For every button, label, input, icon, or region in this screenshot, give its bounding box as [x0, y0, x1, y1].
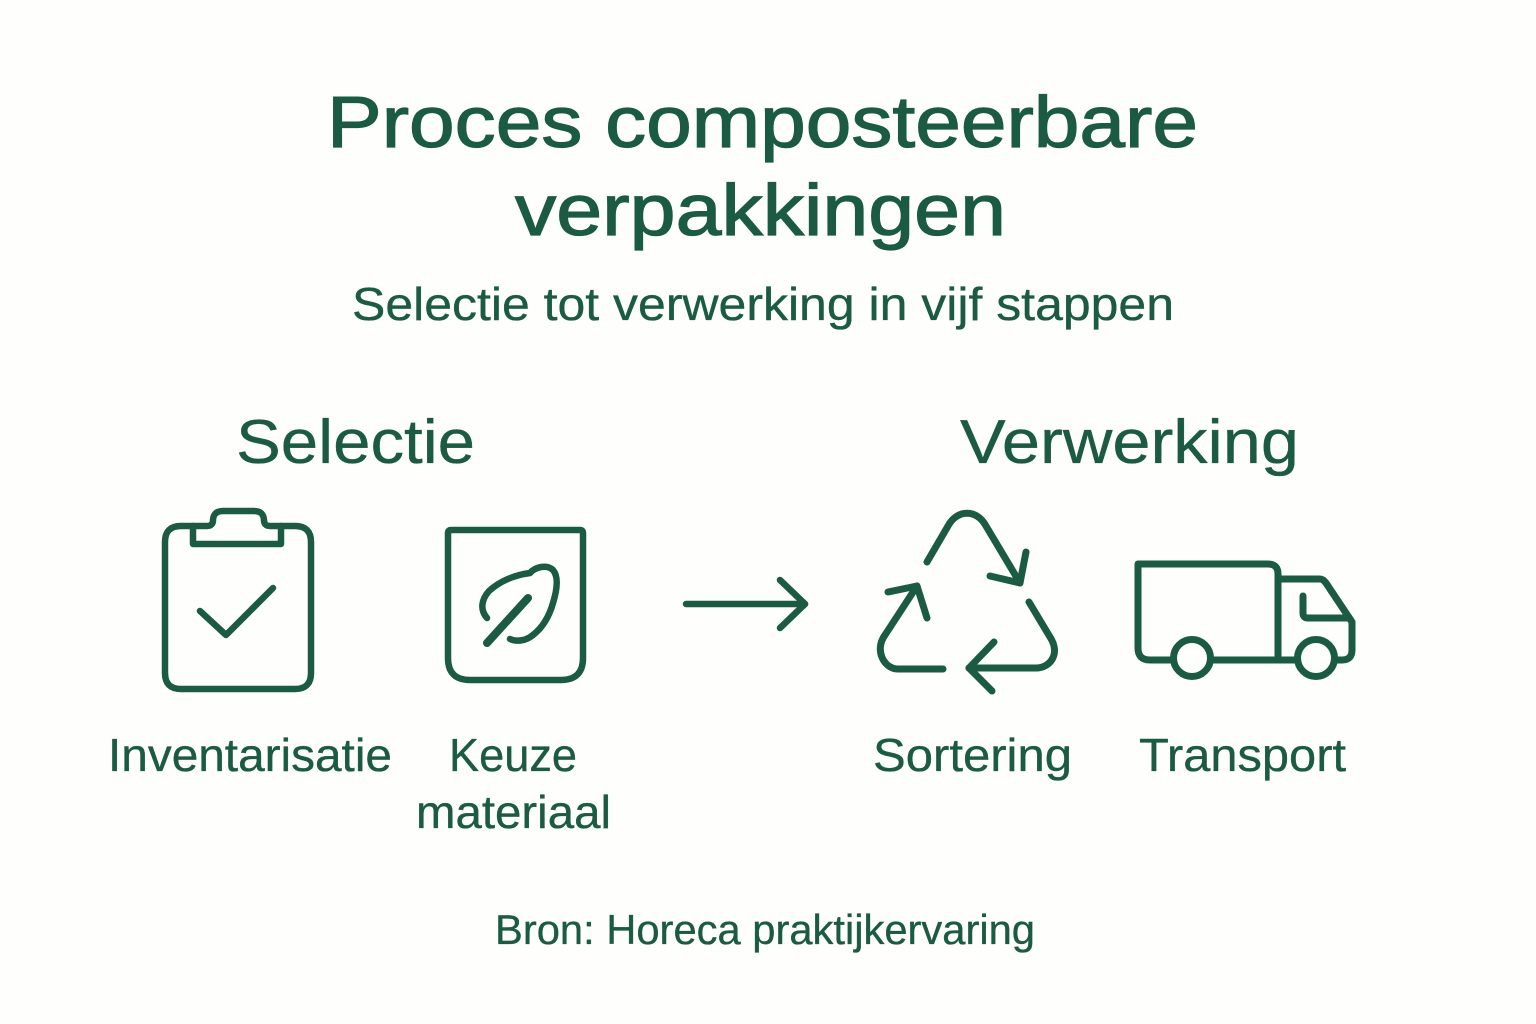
label: Keuze materiaal: Keuze: [449, 729, 577, 781]
heading: Verwerking: Verwerking: [960, 408, 1299, 477]
icon: clipboard with check: [165, 511, 311, 689]
title: Proces composteerbare: [327, 83, 1198, 163]
icon: recycling symbol: [880, 513, 1054, 691]
label: Keuze materiaal: materiaal: [416, 786, 611, 838]
label: Inventarisatie: Inventarisatie: [108, 729, 392, 781]
heading: Selectie: Selectie: [236, 408, 475, 477]
title: verpakkingen: [515, 171, 1006, 251]
source note: Bron: Horeca praktijkervaring: [495, 906, 1035, 953]
title: [327, 83, 1198, 251]
label: Sortering: Sortering: [873, 729, 1072, 781]
icon: delivery truck: [1138, 564, 1352, 676]
label: Transport: Transport: [1139, 729, 1346, 781]
subtitle: Selectie tot verwerking in vijf stappen: [352, 278, 1174, 330]
icon: compostable bag with leaf: [448, 530, 583, 680]
label: Keuze materiaal: [416, 729, 611, 838]
arrow: from Selectie to Verwerking: [686, 580, 805, 628]
